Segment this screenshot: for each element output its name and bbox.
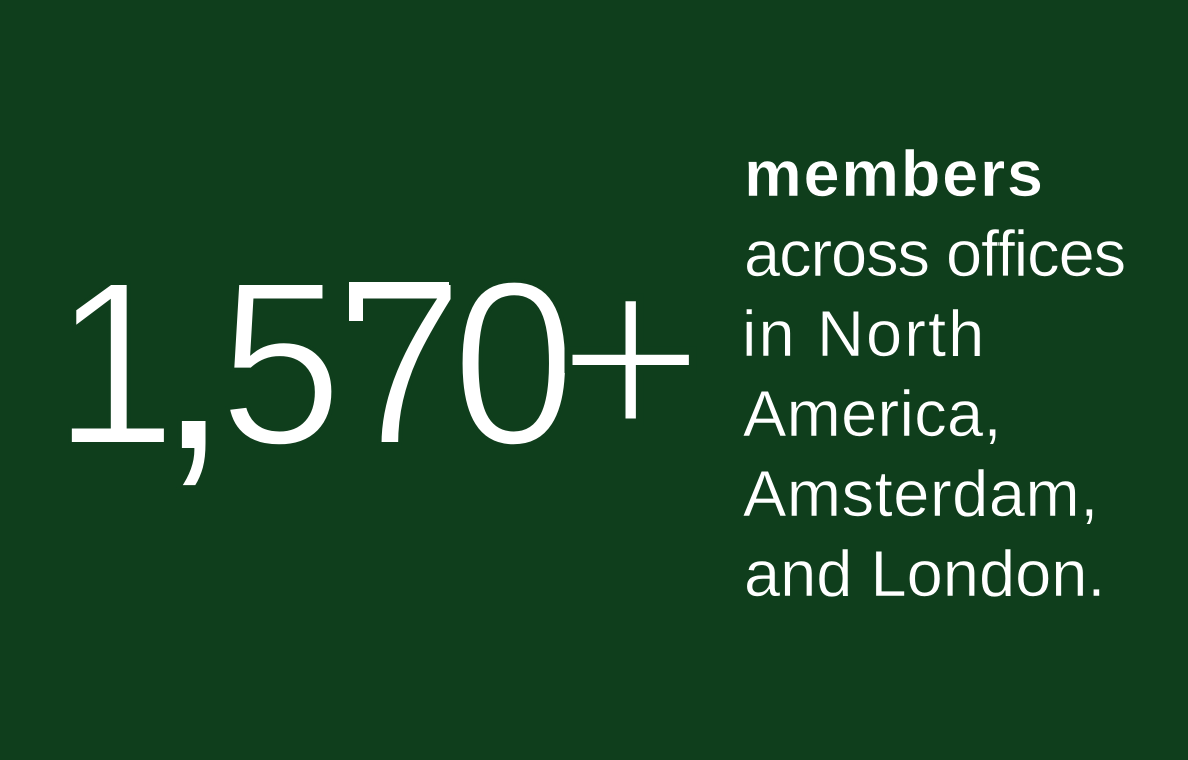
description text: [742, 137, 1125, 610]
line: and London.: and London.: [744, 537, 1105, 610]
big number: 1,570+: +: [556, 214, 706, 500]
big number: 1,570+: 1570: [53, 233, 576, 494]
bold lead word: members: [744, 137, 1045, 210]
line: across offices: across offices: [744, 217, 1125, 290]
big number: 1,570+: [53, 188, 705, 512]
line: Amsterdam,: Amsterdam,: [743, 457, 1099, 530]
line: America,: America,: [743, 377, 1002, 450]
line: in North: in North: [742, 297, 986, 370]
big number: 1,570+: ,: [153, 188, 234, 512]
